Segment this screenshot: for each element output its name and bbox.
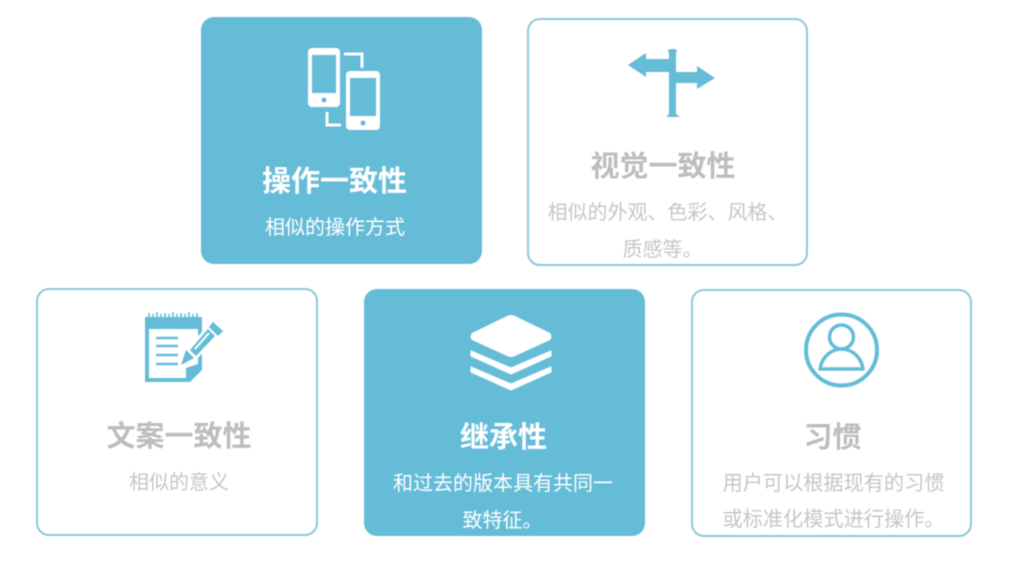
panel: 习惯 <box>691 289 972 537</box>
icon: layers <box>470 314 552 392</box>
text: 相似的意义: 相似的意义 <box>129 472 229 494</box>
text: 相似的外观、色彩、风格、质感等。: 质感等。 <box>622 239 702 261</box>
panel: 视觉一致性 <box>527 18 808 266</box>
text: 相似的外观、色彩、风格、质感等。: 相似的外观、色彩、风格、 <box>548 202 788 224</box>
heading: 文案一致性: 文案一致性 <box>106 421 252 453</box>
heading: 继承性: 继承性 <box>460 422 547 454</box>
heading: 习惯: 习惯 <box>803 422 862 454</box>
heading: 操作一致性: 操作一致性 <box>262 166 407 198</box>
icon: two phones <box>307 47 381 131</box>
icon: user in circle <box>803 312 880 388</box>
text: 相似的操作方式: 相似的操作方式 <box>265 217 405 239</box>
heading: 视觉一致性: 视觉一致性 <box>590 151 736 183</box>
text: 用户可以根据现有的习惯或标准化模式进行操作。: 或标准化模式进行操作。 <box>722 509 945 531</box>
panel: 继承性 <box>364 289 645 536</box>
panel: 操作一致性 <box>201 17 482 264</box>
text: 和过去的版本具有共同一致特征。 <box>393 472 613 532</box>
text: 和过去的版本具有共同一致特征。: 和过去的版本具有共同一 <box>393 473 613 495</box>
text: 用户可以根据现有的习惯或标准化模式进行操作。: 用户可以根据现有的习惯 <box>722 473 945 495</box>
panel: 文案一致性 <box>36 288 318 536</box>
text: 相似的外观、色彩、风格、质感等。 <box>548 202 788 261</box>
text: 用户可以根据现有的习惯或标准化模式进行操作。 <box>722 472 945 531</box>
text: 和过去的版本具有共同一致特征。: 致特征。 <box>462 510 542 532</box>
